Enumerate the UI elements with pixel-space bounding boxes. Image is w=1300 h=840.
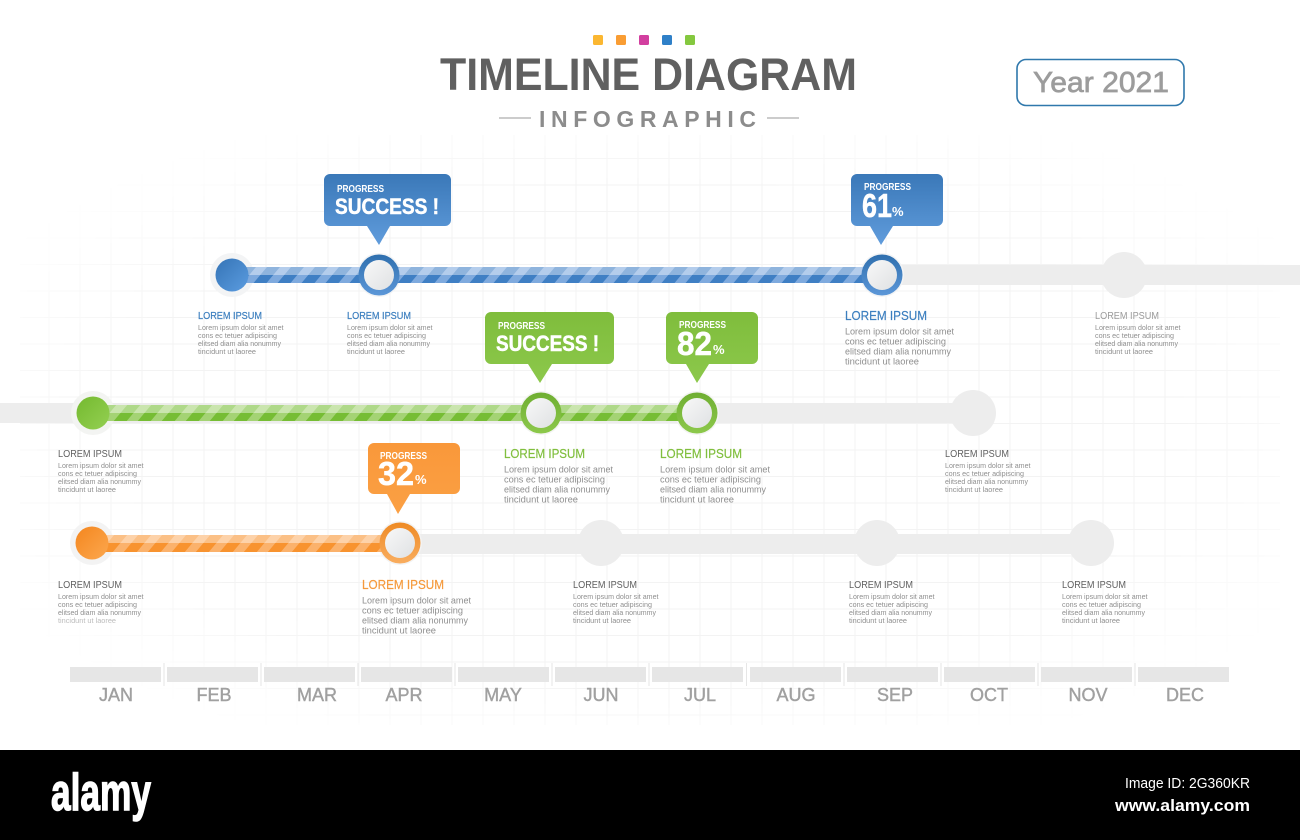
text block: grey top right <box>1095 311 1180 356</box>
callout: orange 32%: 32 <box>378 455 414 492</box>
text block: orange 2: Lorem ipsum dolor sit amet <box>362 596 471 606</box>
text block: blue 3: elitsed diam alia nonummy <box>845 346 951 356</box>
text block: green start: cons ec tetuer adipiscing <box>58 469 137 478</box>
blue progress bar <box>232 267 882 283</box>
text block: grey june <box>573 580 658 625</box>
text block: grey september: cons ec tetuer adipiscing <box>849 600 928 609</box>
text block: grey june: Lorem ipsum dolor sit amet <box>573 592 658 601</box>
text block: green 2: Lorem ipsum dolor sit amet <box>504 464 613 474</box>
text block: green 2: cons ec tetuer adipiscing <box>504 474 605 484</box>
text block: grey september: Lorem ipsum dolor sit amet <box>849 592 934 601</box>
text block: blue 1: tincidunt ut laoree <box>198 347 256 356</box>
image id: Image ID: 2G360KR <box>1125 775 1250 792</box>
text block: green 2 <box>504 446 613 504</box>
grey milestone node <box>1101 252 1147 298</box>
text block: green 2: LOREM IPSUM <box>504 446 585 461</box>
text block: grey november <box>1062 580 1148 625</box>
callout: green success: SUCCESS ! <box>496 331 599 356</box>
text block: blue 3: tincidunt ut laoree <box>845 356 919 366</box>
text block: green 3 <box>660 446 770 504</box>
year badge: Year 2021 <box>1033 67 1169 99</box>
text block: blue 3: Lorem ipsum dolor sit amet <box>845 326 954 336</box>
text block: grey september: LOREM IPSUM <box>849 580 913 591</box>
month axis <box>70 663 1229 705</box>
text block: blue 1: Lorem ipsum dolor sit amet <box>198 323 284 332</box>
node july <box>676 392 718 434</box>
year badge <box>1017 60 1184 106</box>
callout: blue 61%: PROGRESS <box>864 182 911 193</box>
text block: green 3: Lorem ipsum dolor sit amet <box>660 464 770 474</box>
callout: blue success: PROGRESS <box>337 184 384 195</box>
text block: grey middle right: elitsed diam alia nonummy <box>945 477 1028 486</box>
grey milestone nodes <box>578 520 1114 566</box>
month axis: DEC <box>1166 685 1204 705</box>
text block: green start: tincidunt ut laoree <box>58 485 116 494</box>
month axis: AUG <box>776 685 816 705</box>
text block: orange 2: tincidunt ut laoree <box>362 626 436 636</box>
text block: green 3: LOREM IPSUM <box>660 446 742 461</box>
website: www.alamy.com <box>1114 796 1250 815</box>
text block: orange start: cons ec tetuer adipiscing <box>58 600 137 609</box>
callout: orange 32% <box>368 443 460 514</box>
text block: grey november: tincidunt ut laoree <box>1062 616 1120 625</box>
callout: green success: PROGRESS <box>498 321 545 332</box>
callout: green success <box>485 312 614 383</box>
month axis: MAR <box>297 685 337 705</box>
background grid <box>54 151 1246 709</box>
text block: grey middle right: cons ec tetuer adipiscing <box>945 469 1024 478</box>
callout: orange 32%: % <box>415 472 427 487</box>
callout: orange 32%: PROGRESS <box>380 451 427 462</box>
node halos <box>210 253 904 297</box>
node april <box>358 254 400 296</box>
month axis: APR <box>385 685 423 705</box>
text block: grey november: LOREM IPSUM <box>1062 580 1126 591</box>
callout: green 82%: % <box>713 342 725 357</box>
month axis: JUL <box>684 685 716 705</box>
text block: orange 2 <box>362 577 471 636</box>
text block: blue 2: elitsed diam alia nonummy <box>347 339 430 348</box>
orange progress bar <box>92 535 400 552</box>
text block: grey june: cons ec tetuer adipiscing <box>573 600 652 609</box>
text block: grey top right: LOREM IPSUM <box>1095 311 1159 322</box>
text block: grey june: tincidunt ut laoree <box>573 616 631 625</box>
text block: grey november: Lorem ipsum dolor sit amet <box>1062 592 1148 601</box>
text block: green 2: tincidunt ut laoree <box>504 494 578 504</box>
colour dots <box>593 35 695 45</box>
callout: blue 61%: 61 <box>862 187 892 224</box>
text block: grey september <box>849 580 934 625</box>
text block: grey november: elitsed diam alia nonummy <box>1062 608 1145 617</box>
month axis: SEP <box>877 685 913 705</box>
month axis: MAY <box>484 685 522 705</box>
text block: blue 2: LOREM IPSUM <box>347 311 411 322</box>
text block: green 3: elitsed diam alia nonummy <box>660 484 766 494</box>
text block: orange 2: LOREM IPSUM <box>362 577 444 592</box>
text block: green start: LOREM IPSUM <box>58 449 122 460</box>
text block: green start: Lorem ipsum dolor sit amet <box>58 461 144 470</box>
text block: blue 3: cons ec tetuer adipiscing <box>845 336 946 346</box>
text block: grey june: LOREM IPSUM <box>573 580 637 591</box>
text block: green 2: elitsed diam alia nonummy <box>504 484 610 494</box>
text block: blue 3 <box>845 308 954 366</box>
text block: orange 2: cons ec tetuer adipiscing <box>362 606 463 616</box>
callout: blue success: SUCCESS ! <box>335 194 439 219</box>
callout: blue 61%: % <box>892 204 904 219</box>
alamy logo: alamy <box>51 764 151 822</box>
text block: orange start: elitsed diam alia nonummy <box>58 608 141 617</box>
callout: green 82%: PROGRESS <box>679 320 726 331</box>
text block: grey september: tincidunt ut laoree <box>849 616 907 625</box>
start node <box>76 526 108 560</box>
text block: grey june: elitsed diam alia nonummy <box>573 608 656 617</box>
text block: blue 1: elitsed diam alia nonummy <box>198 339 281 348</box>
text block: green 3: tincidunt ut laoree <box>660 494 734 504</box>
text block: blue 2: Lorem ipsum dolor sit amet <box>347 323 432 332</box>
timeline 3: orange <box>70 520 1114 566</box>
subtitle: INFOGRAPHIC <box>539 106 756 132</box>
text block: grey middle right <box>945 449 1030 494</box>
text block: blue 2: tincidunt ut laoree <box>347 347 405 356</box>
grey milestone node <box>950 390 996 436</box>
text block: grey middle right: tincidunt ut laoree <box>945 485 1003 494</box>
text block: orange start: Lorem ipsum dolor sit amet <box>58 592 144 601</box>
text block: grey middle right: Lorem ipsum dolor sit amet <box>945 461 1030 470</box>
node halos <box>71 391 719 435</box>
text block: orange start: tincidunt ut laoree <box>58 616 116 625</box>
timeline 1: blue <box>210 252 1300 298</box>
watermark footer bar <box>0 750 1300 840</box>
text block: grey top right: tincidunt ut laoree <box>1095 347 1153 356</box>
text block: grey november: cons ec tetuer adipiscing <box>1062 600 1141 609</box>
text block: blue 1 <box>198 311 284 356</box>
month axis: NOV <box>1068 685 1108 705</box>
title: TIMELINE DIAGRAM <box>440 49 857 100</box>
text block: grey september: elitsed diam alia nonummy <box>849 608 932 617</box>
text block: grey top right: elitsed diam alia nonummy <box>1095 339 1178 348</box>
text block: blue 2 <box>347 311 432 356</box>
text block: orange 2: elitsed diam alia nonummy <box>362 616 468 626</box>
month axis: JUN <box>584 685 618 705</box>
text block: blue 1: LOREM IPSUM <box>198 311 262 322</box>
text block: orange start <box>58 580 144 625</box>
callout: green 82%: 82 <box>677 325 712 362</box>
node april <box>380 522 420 564</box>
start node <box>76 396 110 430</box>
node september <box>862 254 902 296</box>
month axis: OCT <box>970 685 1008 705</box>
text block: green 3: cons ec tetuer adipiscing <box>660 474 761 484</box>
text block: grey top right: cons ec tetuer adipiscing <box>1095 331 1174 340</box>
month axis: FEB <box>196 685 232 705</box>
text block: grey middle right: LOREM IPSUM <box>945 449 1009 460</box>
month axis: JAN <box>99 685 133 705</box>
text block: green start: elitsed diam alia nonummy <box>58 477 141 486</box>
start node <box>216 258 248 292</box>
text block: grey top right: Lorem ipsum dolor sit amet <box>1095 323 1180 332</box>
callout: blue 61% <box>851 174 943 245</box>
callout: green 82% <box>666 312 758 383</box>
text block: orange start: LOREM IPSUM <box>58 580 122 591</box>
text block: blue 1: cons ec tetuer adipiscing <box>198 331 277 340</box>
text block: blue 2: cons ec tetuer adipiscing <box>347 331 426 340</box>
callout: blue success <box>324 174 451 245</box>
green progress bar <box>93 405 697 421</box>
node june <box>520 392 562 434</box>
node halos <box>70 521 422 565</box>
timeline 2: green <box>0 390 996 436</box>
text block: green start <box>58 449 144 494</box>
text block: blue 3: LOREM IPSUM <box>845 308 927 323</box>
